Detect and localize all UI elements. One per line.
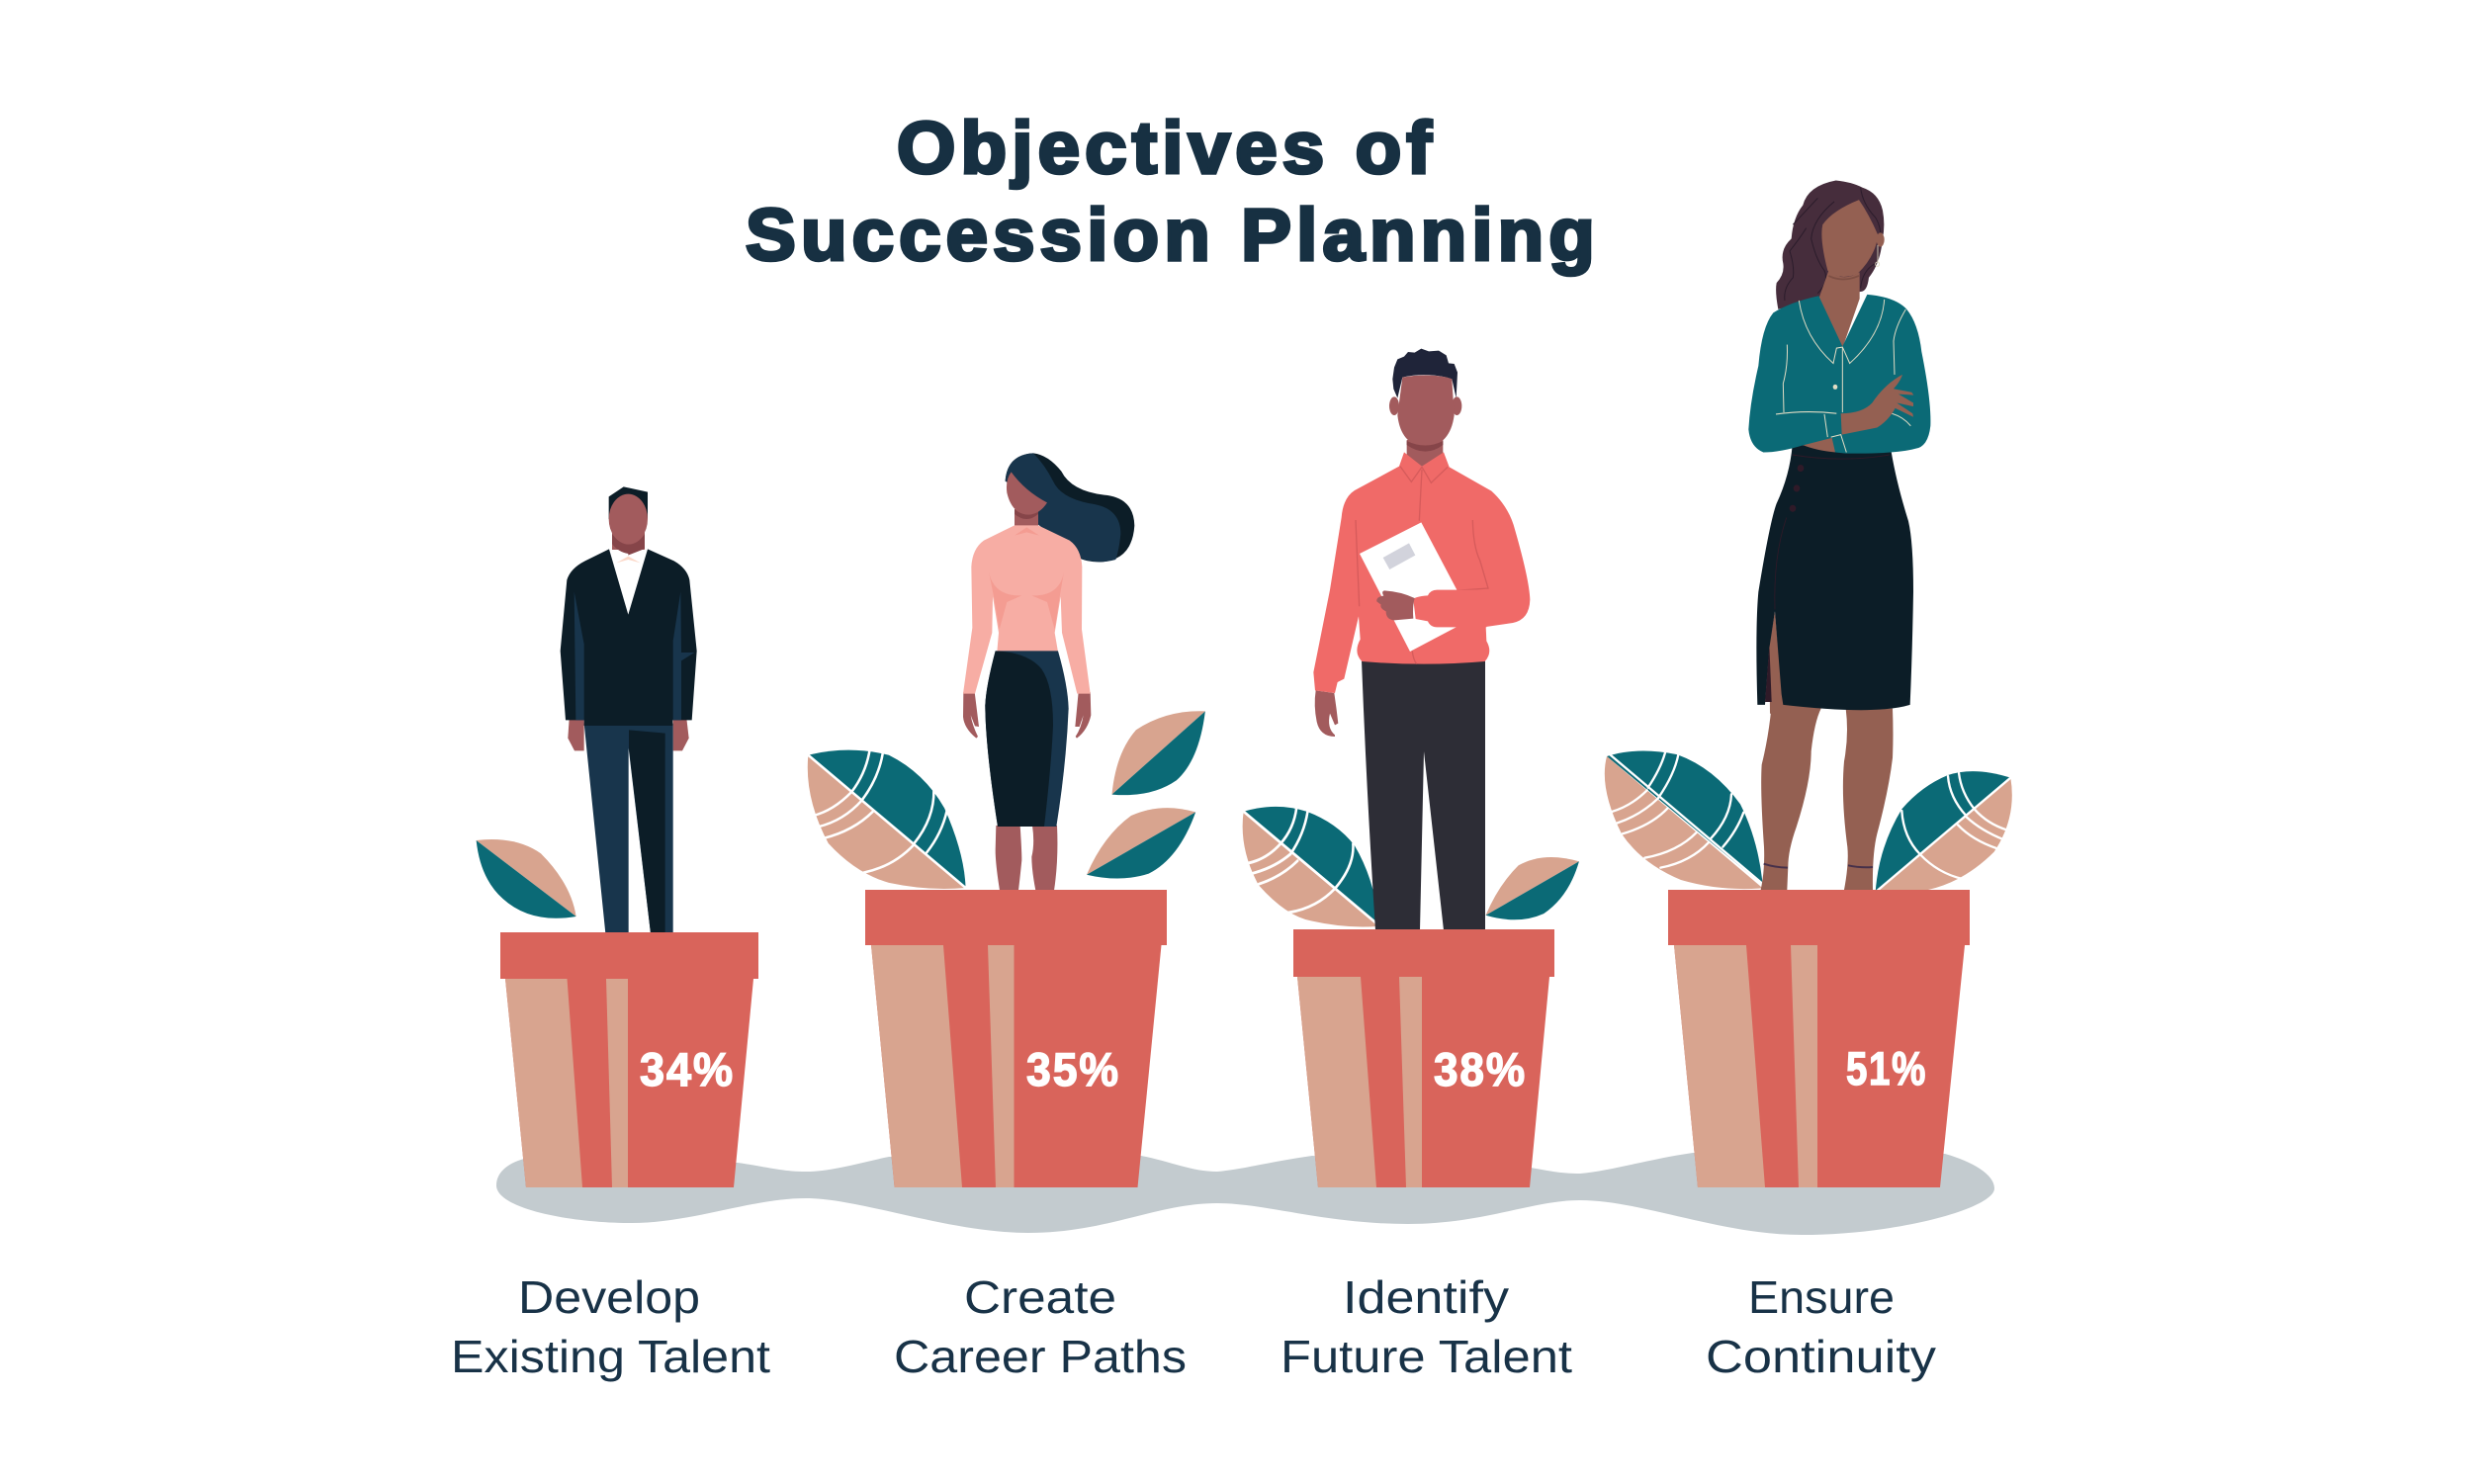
label: Ensure Continuity: Continuity xyxy=(1706,1331,1936,1382)
label: Create Career Paths xyxy=(894,1271,1187,1382)
label: Identify Future Talent: Identify xyxy=(1343,1271,1509,1323)
column: Develop Existing Talent xyxy=(451,486,770,1382)
pot 2 xyxy=(865,890,1167,1187)
title xyxy=(746,107,1600,276)
figure: man in dark suit xyxy=(561,486,697,933)
label: Develop Existing Talent: Develop xyxy=(518,1271,700,1323)
leaf: pot 1 xyxy=(477,839,576,918)
column: Create Career Paths xyxy=(808,453,1205,1382)
percentage 51%: 51% xyxy=(1846,1042,1927,1094)
title: Succession Planning xyxy=(746,194,1600,276)
label: Ensure Continuity: Ensure xyxy=(1748,1271,1895,1323)
title: Objectives of xyxy=(897,107,1437,189)
pot 3 xyxy=(1293,929,1554,1187)
pot 1 xyxy=(500,932,758,1187)
label: Identify Future Talent xyxy=(1281,1271,1572,1382)
column: Identify Future Talent xyxy=(1243,349,1579,1382)
leaves: pot 4 xyxy=(1605,751,2012,894)
percentage 35%: 35% xyxy=(1026,1043,1120,1095)
label: Identify Future Talent: Future Talent xyxy=(1281,1331,1572,1382)
label: Develop Existing Talent: Existing Talent xyxy=(451,1331,770,1382)
label: Create Career Paths: Create xyxy=(964,1271,1116,1323)
leaves: pot 3 xyxy=(1243,807,1579,926)
figure: man in coral shirt with folder xyxy=(1313,349,1530,930)
label: Ensure Continuity xyxy=(1706,1271,1936,1382)
label: Create Career Paths: Career Paths xyxy=(894,1331,1187,1382)
pot 4 xyxy=(1668,890,1970,1187)
percentage 38%: 38% xyxy=(1434,1043,1527,1095)
figure: woman in pink top xyxy=(963,453,1134,891)
percentage 34%: 34% xyxy=(640,1043,735,1095)
figure: woman in teal blouse xyxy=(1748,180,1930,890)
leaves: pot 2 xyxy=(808,711,1205,889)
label: Develop Existing Talent xyxy=(451,1271,770,1382)
column: Ensure Continuity xyxy=(1605,180,2012,1382)
ground shadow xyxy=(496,1153,1994,1235)
